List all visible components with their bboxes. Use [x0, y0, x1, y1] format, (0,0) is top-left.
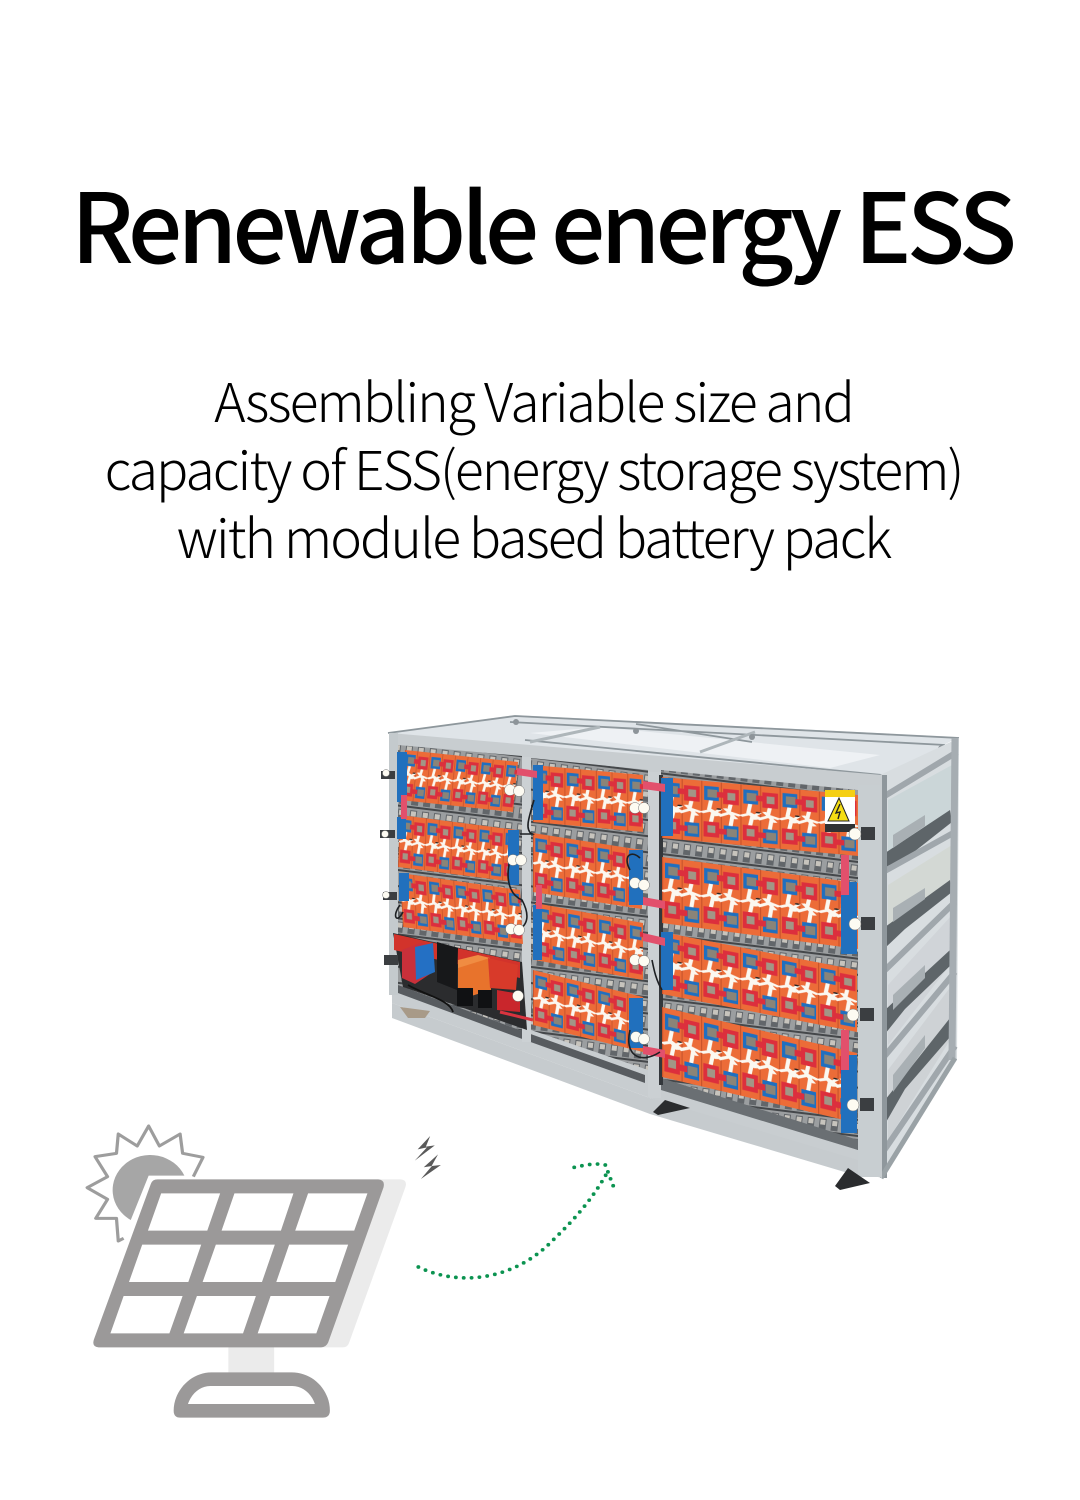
caution label	[825, 790, 855, 832]
battery module rows: middle section	[533, 765, 643, 1052]
mounting brackets and white knobs	[380, 770, 875, 1111]
icon: solar panel with sun	[86, 1124, 406, 1418]
arrow: dotted green curve	[416, 1162, 616, 1280]
panel shadow and stand	[228, 1179, 406, 1374]
blue side bars and pink bus links	[396, 752, 857, 1133]
battery module rows: left section	[398, 750, 523, 944]
subtitle text block: capacity of ESS(energy storage system)	[105, 429, 962, 506]
support feet	[400, 1007, 870, 1190]
front frame	[389, 733, 882, 1178]
subtitle text block: with module based battery pack	[177, 497, 890, 574]
battery module rows: right section	[662, 777, 858, 1123]
battery rack ESS illustration	[380, 715, 959, 1190]
sun outline	[87, 1126, 203, 1241]
solar panel grid	[93, 1179, 384, 1347]
top frame of rack	[388, 715, 959, 777]
sun disk	[113, 1155, 184, 1220]
subtitle text block: Assembling Variable size and	[214, 361, 853, 438]
control panel with switch and breaker	[393, 933, 533, 1030]
title: Renewable energy ESS	[71, 152, 1012, 291]
subtitle text block	[105, 361, 962, 574]
panel base	[174, 1372, 330, 1418]
icon: lightning bolts	[415, 1136, 441, 1179]
side frame and shelves	[880, 738, 959, 1178]
